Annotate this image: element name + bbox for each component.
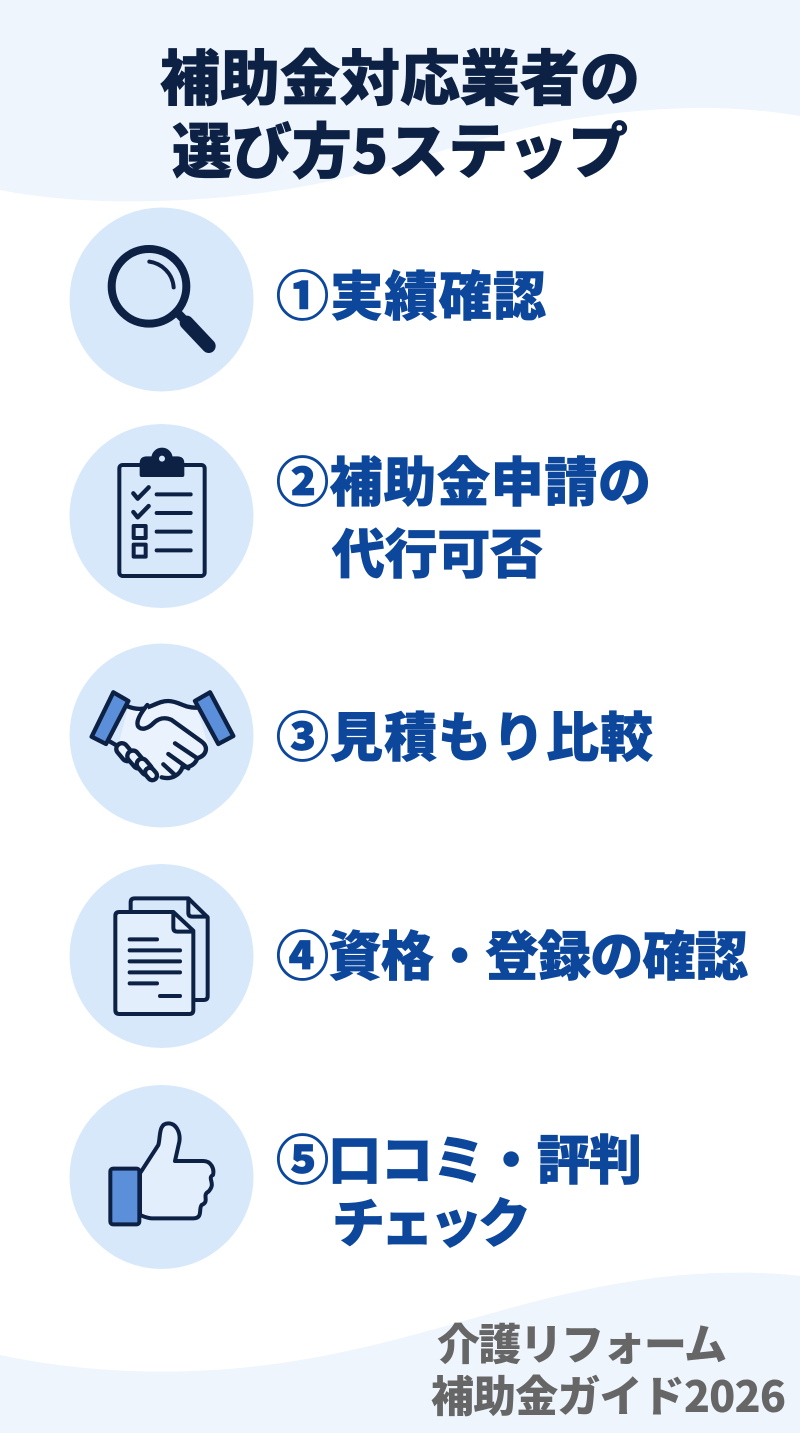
icon circle 2: [70, 424, 254, 608]
icon: magnifying glass: [112, 249, 209, 346]
step 4: licence check: [70, 864, 748, 1048]
step 2: subsidy application: [70, 424, 651, 608]
title: 補助金対応業者の: [160, 31, 640, 118]
step 5 label: ⑤口コミ・評判: [276, 1119, 642, 1195]
icon circle 5: [70, 1085, 254, 1269]
icon circle 1: [70, 208, 254, 392]
step 5 label: [276, 1119, 642, 1258]
icon: documents: [115, 898, 208, 1014]
step 4 label: ④資格・登録の確認: [276, 915, 748, 991]
top background wave: [0, 0, 800, 201]
footer brand text: 介護リフォーム: [437, 1311, 727, 1373]
step 2 label: ②補助金申請の: [276, 441, 651, 517]
icon: handshake: [92, 692, 233, 782]
step 1: track record: [70, 208, 546, 392]
icon circle 4: [70, 864, 254, 1048]
icon: clipboard checklist: [119, 450, 205, 576]
step 3 label: ③見積もり比較: [276, 696, 653, 772]
footer brand text: [431, 1311, 786, 1425]
icon: thumbs up: [110, 1123, 213, 1224]
step 2 label: [276, 441, 651, 589]
step 5: reviews: [70, 1085, 642, 1269]
title: 選び方5ステップ: [172, 104, 628, 191]
step 5 label: チェック: [332, 1182, 531, 1258]
icon circle 3: [70, 644, 254, 828]
step 3: quote comparison: [70, 644, 653, 828]
bottom background wave: [0, 1273, 800, 1433]
step 1 label: ①実績確認: [276, 255, 546, 331]
footer brand text: 補助金ガイド2026: [431, 1363, 786, 1425]
title: [160, 31, 640, 191]
step 2 label: 代行可否: [332, 513, 543, 589]
